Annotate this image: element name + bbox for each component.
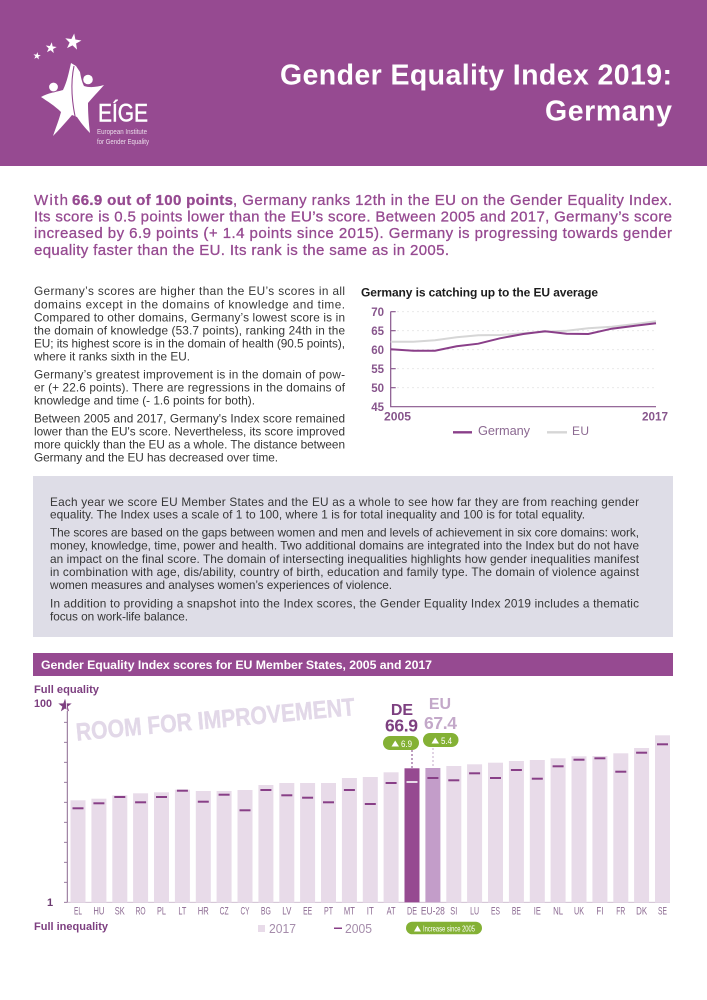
body text: improvement: knowledge and time (- 1.6 points for both). bbox=[34, 393, 255, 407]
line chart legend: Germany bbox=[478, 423, 531, 438]
country labels: MT bbox=[344, 906, 355, 918]
panel: about the index: in combination with age, dis/ability, country of birth, education and family type. The domain of violence against bbox=[50, 565, 640, 579]
country labels: EE bbox=[303, 906, 312, 918]
country labels bbox=[74, 906, 667, 918]
y axis labels bbox=[371, 307, 385, 414]
intro summary: With bbox=[34, 192, 68, 209]
axis labels: Full inequality bbox=[34, 921, 109, 933]
panel: about the index: The scores are based on the gaps between women and men and levels of achievement in six core domains: work, bbox=[50, 526, 639, 540]
country labels: LU bbox=[470, 906, 479, 918]
country labels: LV bbox=[282, 906, 292, 918]
body text: domain scores: domains except in the domains of knowledge and time. bbox=[34, 297, 345, 311]
country labels: IT bbox=[367, 906, 374, 918]
country labels: BG bbox=[261, 906, 271, 918]
y axis labels: 45 bbox=[371, 402, 385, 414]
intro summary: equality faster than the EU. Its rank is the same as in 2005. bbox=[34, 242, 449, 259]
title bbox=[280, 60, 672, 128]
body text: improvement: Germany’s greatest improvement is in the domain of pow- bbox=[34, 367, 345, 381]
country labels: ES bbox=[491, 906, 500, 918]
y axis labels: 50 bbox=[371, 383, 384, 395]
country labels: SE bbox=[658, 906, 667, 918]
country labels: NL bbox=[553, 906, 563, 918]
intro summary: 66.9 out of 100 points bbox=[72, 192, 233, 209]
axis labels: 1 bbox=[47, 897, 53, 909]
country labels: HU bbox=[93, 906, 104, 918]
2005 markers bbox=[72, 743, 668, 811]
title: Germany bbox=[545, 96, 672, 128]
bar chart legend: 2017 bbox=[269, 921, 296, 936]
body text: domain scores: EU; its highest score is in the domain of health (90.5 points), bbox=[34, 337, 345, 351]
country labels: CY bbox=[240, 906, 250, 918]
logo: EIGE: EÍGE bbox=[98, 98, 148, 128]
room for improvement label: ROOM FOR IMPROVEMENT bbox=[75, 693, 356, 747]
callout: EU score: 67.4 bbox=[424, 713, 457, 733]
country labels: AT bbox=[387, 906, 396, 918]
title: Gender Equality Index 2019: bbox=[280, 60, 672, 92]
callout: EU score: EU bbox=[429, 696, 451, 713]
body text: trend: lower than the EU's score. Nevertheless, its score improved bbox=[34, 424, 345, 438]
body text: trend bbox=[34, 412, 345, 465]
intro summary: increased by 6.9 points (+ 1.4 points since 2015). Germany is progressing towards gender bbox=[34, 225, 672, 242]
panel: about the index: equality. The Index uses a scale of 1 to 100, where 1 is for total inequality and 100 is for total equality. bbox=[50, 508, 585, 522]
body text: domain scores: where it ranks sixth in the EU. bbox=[33, 350, 190, 364]
increase legend pill: Increase since 2005 bbox=[423, 923, 475, 933]
body text: domain scores: Compared to other domains, Germany’s lowest score is in bbox=[34, 310, 345, 324]
country labels: LT bbox=[178, 906, 187, 918]
panel: about the index: women measures and analyses women’s experiences of violence. bbox=[49, 578, 392, 592]
logo: EIGE bbox=[33, 32, 149, 146]
callout: Germany score: DE bbox=[391, 702, 413, 719]
country labels: PL bbox=[157, 906, 166, 918]
line chart: Germany vs EU bbox=[361, 286, 668, 438]
y axis labels: 55 bbox=[371, 364, 385, 376]
body text: domain scores: the domain of knowledge (53.7 points), ranking 24th in the bbox=[34, 323, 345, 337]
callout: EU score bbox=[423, 696, 458, 768]
x axis labels: 2017 bbox=[642, 410, 668, 424]
logo: EIGE: for Gender Equality bbox=[97, 139, 149, 146]
bar chart legend: 2005 bbox=[345, 921, 372, 936]
x axis labels bbox=[384, 410, 668, 424]
country labels: RO bbox=[136, 906, 146, 918]
country labels: IE bbox=[534, 906, 541, 918]
icon: star at full equality bbox=[58, 699, 72, 711]
y axis labels: 70 bbox=[371, 307, 384, 319]
bars bbox=[70, 735, 670, 902]
Germany line bbox=[391, 323, 656, 351]
intro summary bbox=[34, 192, 672, 259]
heading: bar chart bbox=[33, 653, 673, 676]
intro summary: , Germany ranks 12th in the EU on the Gender Equality Index. bbox=[233, 192, 672, 209]
country labels: BE bbox=[512, 906, 521, 918]
y axis labels: 65 bbox=[371, 326, 385, 338]
country labels: FR bbox=[616, 906, 625, 918]
country labels: FI bbox=[596, 906, 603, 918]
country labels: HR bbox=[198, 906, 209, 918]
logo: EIGE: European Institute bbox=[97, 129, 147, 136]
body text: trend: Germany and the EU has decreased over time. bbox=[34, 451, 278, 465]
panel: about the index bbox=[33, 476, 673, 637]
country labels: DE bbox=[407, 906, 417, 918]
line chart title: Germany is catching up to the EU average bbox=[361, 286, 598, 300]
x axis labels: 2005 bbox=[384, 410, 411, 424]
panel: about the index: Each year we score EU Member States and the EU as a whole to see how far they are from reaching gender bbox=[50, 495, 639, 509]
body text: improvement: er (+ 22.6 points). There are regressions in the domains of bbox=[34, 380, 346, 394]
body text: improvement bbox=[34, 367, 346, 407]
country labels: SK bbox=[115, 906, 125, 918]
callout: EU score: 5.4 bbox=[441, 736, 452, 746]
line chart legend bbox=[453, 423, 589, 438]
EU line bbox=[391, 321, 656, 342]
country labels: SI bbox=[450, 906, 457, 918]
heading: bar chart: Gender Equality Index scores for EU Member States, 2005 and 2017 bbox=[41, 658, 432, 672]
line chart legend: EU bbox=[572, 424, 589, 438]
body text: domain scores: Germany’s scores are higher than the EU’s scores in all bbox=[34, 284, 345, 298]
country labels: EL bbox=[74, 906, 82, 918]
intro summary: Its score is 0.5 points lower than the EU’s score. Between 2005 and 2017, Germany’s score bbox=[34, 208, 672, 226]
panel: about the index: money, knowledge, time, power and health. Two additional domains are integrated into the Index but do not have bbox=[50, 539, 639, 553]
axis labels: Full equality bbox=[34, 684, 100, 696]
body text: domain scores bbox=[33, 284, 345, 364]
panel: about the index: In addition to providing a snapshot into the Index scores, the Gender Equality Index 2019 includes a thematic bbox=[50, 597, 639, 611]
panel: about the index: an impact on the final score. The domain of intersecting inequalities highlights how gender inequalities manifest bbox=[50, 552, 640, 566]
axis bbox=[64, 705, 670, 902]
body text: trend: more quickly than the EU as a whole. The distance between bbox=[34, 438, 345, 452]
body text: trend: Between 2005 and 2017, Germany's Index score remained bbox=[34, 412, 345, 426]
callout: Germany score bbox=[383, 702, 419, 768]
country labels: EU-28 bbox=[421, 906, 445, 918]
country labels: CZ bbox=[220, 906, 229, 918]
country labels: DK bbox=[636, 906, 648, 918]
axis labels: 100 bbox=[34, 698, 52, 710]
axis labels bbox=[34, 684, 109, 933]
bar chart: EU Member States bbox=[34, 684, 670, 936]
country labels: PT bbox=[324, 906, 333, 918]
callout: Germany score: 66.9 bbox=[385, 716, 418, 736]
increase legend pill bbox=[406, 922, 482, 934]
bar chart legend bbox=[258, 921, 372, 936]
line chart axes bbox=[391, 312, 656, 407]
panel: about the index: focus on work-life balance. bbox=[50, 609, 188, 623]
callout: Germany score: 6.9 bbox=[401, 739, 412, 749]
country labels: UK bbox=[574, 906, 585, 918]
y axis labels: 60 bbox=[371, 345, 384, 357]
header band bbox=[0, 0, 707, 166]
